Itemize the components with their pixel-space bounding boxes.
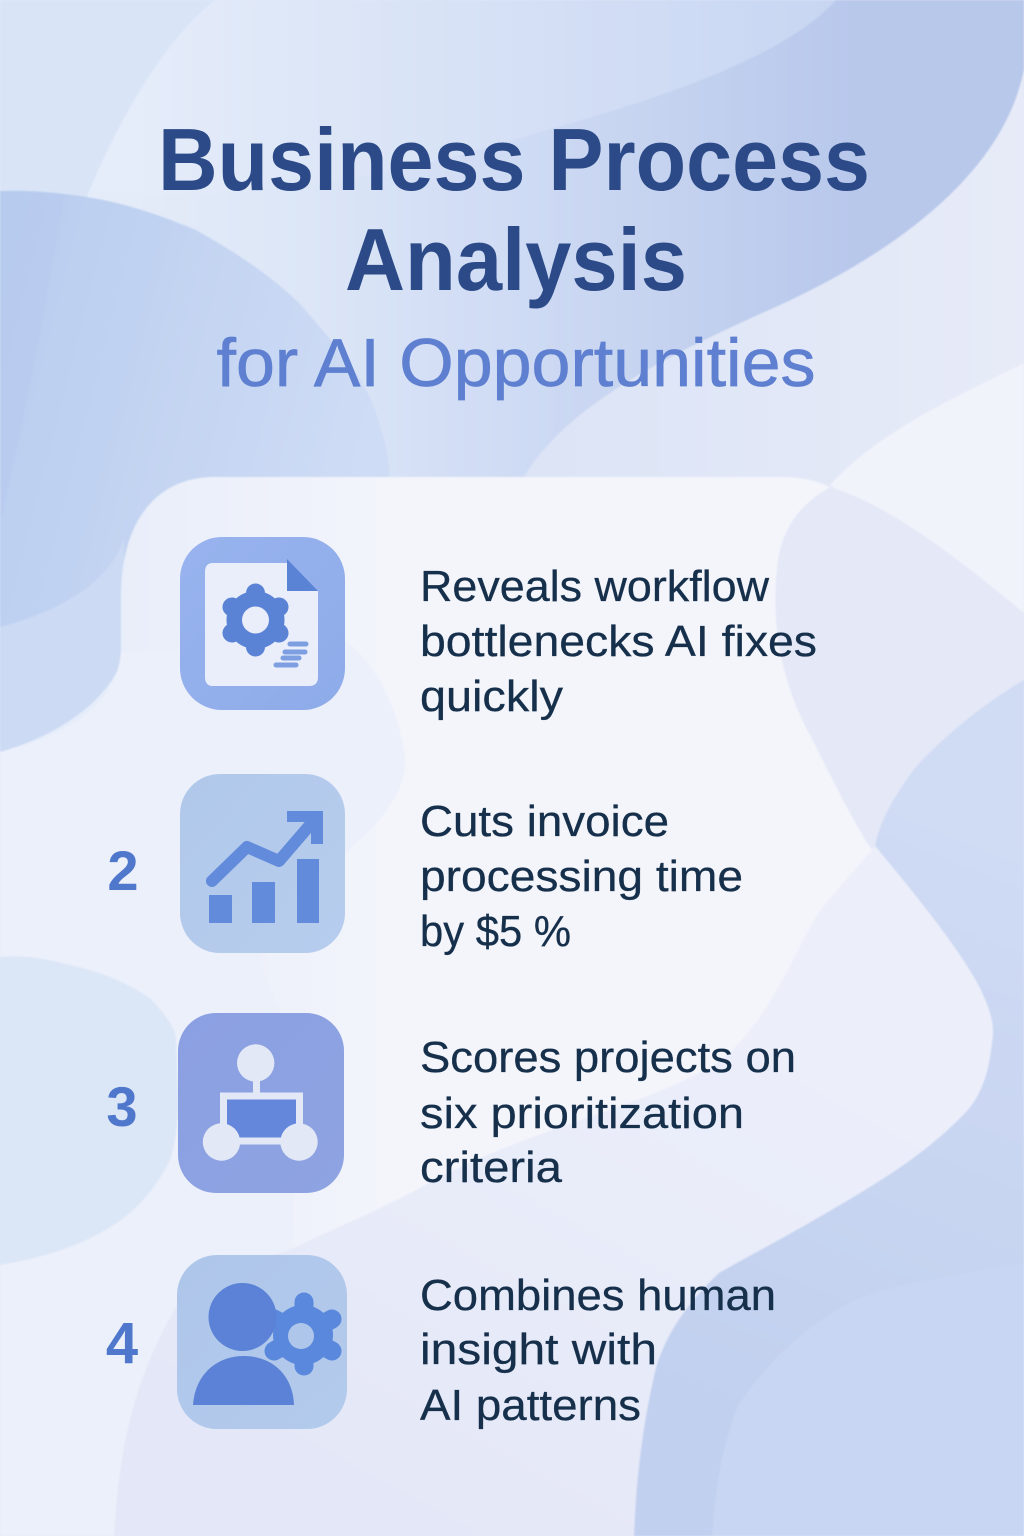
item 2: growth chart icon bbox=[180, 774, 345, 953]
item 4 text bbox=[420, 1271, 776, 1430]
item 1 text: bottlenecks AI fixes bbox=[420, 617, 817, 666]
item 3 number: 3 bbox=[106, 1075, 138, 1138]
item 2 text: processing time bbox=[420, 852, 743, 901]
item 1 text: quickly bbox=[420, 672, 563, 721]
item 2 text: by $5 % bbox=[420, 907, 571, 956]
title: Analysis bbox=[345, 210, 687, 309]
item 1: document gear icon bbox=[180, 537, 345, 710]
item 1 text: Reveals workflow bbox=[420, 562, 769, 611]
item 3 text bbox=[420, 1033, 796, 1192]
item 4 number: 4 bbox=[106, 1311, 138, 1376]
gear bbox=[273, 1302, 333, 1366]
title: Business Process bbox=[158, 110, 870, 209]
item 2 text bbox=[420, 797, 743, 956]
item 4 text: Combines human bbox=[420, 1271, 776, 1320]
item 2 text: Cuts invoice bbox=[420, 797, 669, 846]
subtitle: for AI Opportunities bbox=[216, 325, 816, 401]
item 4 text: AI patterns bbox=[420, 1381, 641, 1430]
item 3 text: criteria bbox=[420, 1143, 563, 1192]
item 4: person and gear icon bbox=[177, 1255, 347, 1429]
item 3 text: Scores projects on bbox=[420, 1033, 796, 1082]
item 1 text bbox=[420, 562, 817, 721]
gear bbox=[226, 591, 284, 649]
item 2 number: 2 bbox=[107, 839, 139, 902]
item 4 text: insight with bbox=[420, 1325, 657, 1374]
item 3: flow diagram icon bbox=[178, 1013, 344, 1193]
item 3 text: six prioritization bbox=[420, 1089, 744, 1138]
title bbox=[158, 110, 870, 309]
